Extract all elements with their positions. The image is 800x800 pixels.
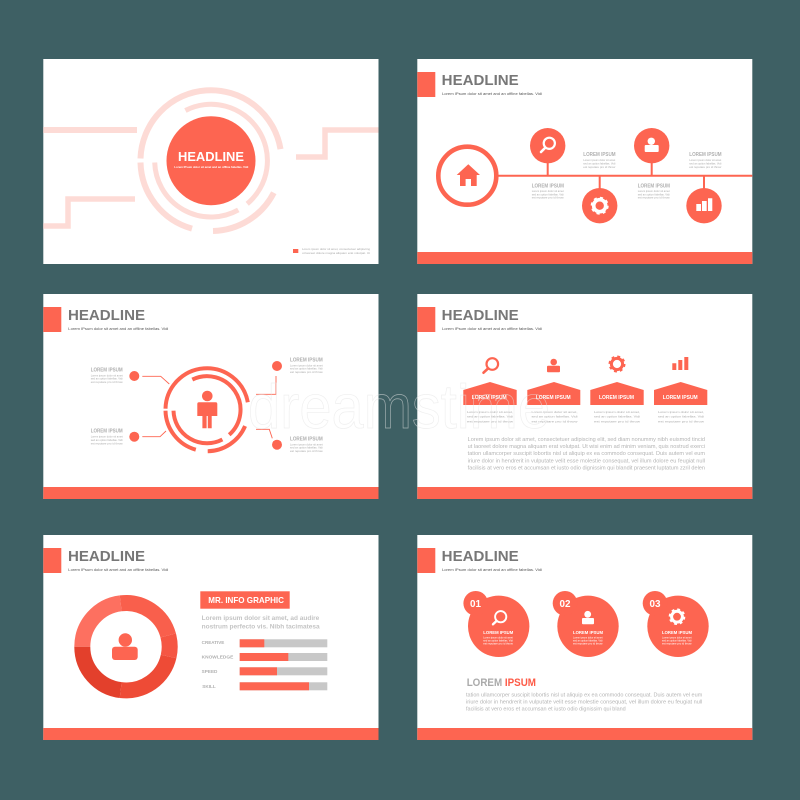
node dots: [129, 361, 282, 450]
step 2 text: sed an option fabellas. Vidi: [532, 415, 578, 419]
label: bottom right: [290, 437, 324, 453]
icon: person: [634, 128, 669, 163]
icon: bars: [686, 188, 722, 223]
skill bar chart: [202, 639, 327, 690]
icon: home: [438, 147, 496, 205]
section heading: LOREM IPSUM: [467, 677, 536, 689]
label: timeline 3: [638, 183, 671, 200]
footer bar: [417, 728, 752, 740]
circle 03: LOREM IPSUM: [662, 630, 692, 635]
circle 01: [463, 591, 529, 657]
circle 02: LOREM IPSUM: [573, 630, 603, 635]
icon: magnifier: [530, 128, 565, 163]
header marker: [43, 548, 61, 573]
label: timeline 4: sed an option fabellas. Vidi: [689, 161, 722, 165]
step 3 tab: LOREM IPSUM: [599, 395, 634, 401]
label: timeline 2: est reputare pro id throw: [583, 165, 616, 169]
footer bar: [43, 728, 379, 740]
subtitle: Lorem IPsum dolor sit amet and an offline fabellas. Vidi: [68, 567, 168, 572]
subtitle: Lorem IPsum dolor sit amet and an offline fabellas. Vidi: [68, 326, 168, 331]
header marker: [417, 72, 435, 97]
label: top right: LOREM IPSUM: [290, 358, 323, 364]
panel: three circles slide: [417, 535, 752, 740]
step 1 text: est reputare pro id throw: [467, 419, 514, 423]
circle 03: 03: [650, 599, 661, 610]
step 4 text: [658, 410, 705, 423]
label: top left: LOREM IPSUM: [91, 368, 123, 374]
label: top right: sed an option fabellas. Vidi: [290, 367, 323, 371]
label: timeline 4: LOREM IPSUM: [689, 152, 722, 158]
icon: gear: [582, 188, 617, 223]
step 2 text: Lorem ipsum dolor sit amet,: [532, 410, 578, 414]
timeline axis with stems: [498, 163, 752, 190]
legend marker: [293, 249, 298, 253]
skill bar chart: CREATIVE: [202, 640, 224, 645]
step 4 text: sed an option fabellas. Vidi: [658, 415, 704, 419]
label: bottom left: LOREM IPSUM: [91, 429, 123, 435]
footer bar: [43, 487, 379, 499]
panel: profile slide: [43, 535, 379, 740]
circle 03: est reputare pro id throw: [662, 641, 692, 645]
label: bottom left: Lorem ipsum dolor sit amet: [91, 435, 123, 439]
step 4 tab: [654, 382, 707, 405]
body paragraph: [468, 437, 705, 471]
circle 01: sed an option fabellas. Vidi: [483, 638, 513, 642]
step 3 text: Lorem ipsum dolor sit amet,: [594, 410, 640, 414]
center circle: [166, 116, 256, 205]
step 1 tab: [463, 382, 517, 405]
label: bottom left: est reputare pro id throw: [91, 441, 124, 445]
name banner: [200, 591, 290, 609]
label: timeline 2: LOREM IPSUM: [583, 152, 616, 158]
section body text: facilisis at vero eros et accumsan et iusto odio dignissim qui bland: [466, 706, 626, 712]
cover subtitle: Lorem IPsum dolor sit amet and an offline fabellas. Vidi: [174, 165, 248, 169]
headline: HEADLINE: [442, 72, 519, 89]
footer bar: [417, 487, 752, 499]
label: bottom left: sed an option fabellas. Vidi: [91, 438, 123, 442]
step 4 text: est reputare pro id throw: [658, 419, 705, 423]
right stepped circuit line: [296, 130, 378, 157]
donut chart: [82, 603, 170, 690]
step 3 text: sed an option fabellas. Vidi: [594, 415, 640, 419]
circle 01: LOREM IPSUM: [483, 630, 514, 635]
connectors: [142, 376, 276, 438]
left stepped circuit line: [43, 199, 135, 226]
icon: bars: [672, 357, 688, 370]
label: timeline 3: LOREM IPSUM: [638, 183, 670, 189]
profile text: [202, 615, 320, 630]
panel: four steps slide: [417, 294, 752, 499]
circle 02: Lorem ipsum dolor sit amet: [573, 635, 603, 639]
concentric ring arcs: [140, 90, 280, 231]
icon: person: [547, 359, 560, 372]
label: timeline 2: [583, 152, 616, 169]
label: top right: est reputare pro id throw: [290, 370, 324, 374]
step 2 text: [532, 410, 579, 423]
step 2 tab: LOREM IPSUM: [536, 395, 571, 401]
label: bottom right: est reputare pro id throw: [290, 449, 324, 453]
label: timeline 1: LOREM IPSUM: [532, 183, 564, 189]
step 3 text: est reputare pro id throw: [594, 419, 641, 423]
subtitle: Lorem IPsum dolor sit amet and an offline fabellas. Vidi: [442, 326, 542, 331]
body paragraph: Lorem ipsum dolor sit amet, consectetuer adipiscing elit, sed diam nonummy nibh euismod tincid: [468, 437, 705, 443]
label: bottom right: sed an option fabellas. Vidi: [290, 446, 323, 450]
body paragraph: ut laoreet dolore magna aliquam erat volutpat. Ut wisi enim ad minim veniam, quis nostrud exerci: [468, 444, 705, 450]
headline: HEADLINE: [68, 307, 145, 324]
circle 02: est reputare pro id throw: [573, 641, 603, 645]
circle 03: [643, 591, 709, 657]
circle 02: 02: [560, 599, 571, 610]
circle 03: Lorem ipsum dolor sit amet: [662, 635, 692, 639]
label: bottom right: LOREM IPSUM: [290, 437, 323, 443]
header marker: [417, 307, 435, 332]
step 4 tab: LOREM IPSUM: [663, 395, 698, 401]
label: top left: Lorem ipsum dolor sit amet: [91, 374, 123, 378]
legend text: Lorem ipsum dolor sit amet, consectetuer adipiscing: [302, 247, 370, 251]
skill bar chart: SPEED: [202, 669, 218, 674]
headline: HEADLINE: [68, 548, 145, 565]
left circuit line top: [43, 127, 137, 133]
label: top right: [290, 358, 324, 374]
label: timeline 1: Lorem ipsum dolor sit amet: [532, 189, 564, 193]
cover headline: HEADLINE: [178, 149, 244, 164]
label: timeline 1: sed an option fabellas. Vidi: [532, 192, 564, 196]
ring diagram: [166, 368, 248, 451]
body paragraph: facilisis at vero eros et accumsan et iusto odio dignissim qui blandit praesent luptatum zzril delen: [468, 465, 705, 471]
label: top left: [91, 368, 124, 384]
label: timeline 4: Lorem ipsum dolor sit amet: [689, 158, 721, 162]
profile text: Lorem ipsum dolor sit amet, ad audire: [202, 615, 320, 622]
skill bar chart: KNOWLEDGE: [202, 655, 233, 660]
name banner: MR. INFO GRAPHIC: [208, 595, 284, 605]
legend text: [302, 247, 370, 255]
step 4 text: Lorem ipsum dolor sit amet,: [658, 410, 704, 414]
label: bottom right: Lorem ipsum dolor sit amet: [290, 443, 323, 447]
body paragraph: tation ullamcorper suscipit lobortis nisl ut aliquip ex ea commodo consequat. Duis autem vel eum: [468, 451, 705, 457]
label: top left: est reputare pro id throw: [91, 380, 124, 384]
label: top right: Lorem ipsum dolor sit amet: [290, 364, 323, 368]
label: timeline 3: sed an option fabellas. Vidi: [638, 192, 670, 196]
header marker: [43, 307, 61, 332]
circle 01: 01: [470, 599, 481, 610]
section body text: tation ullamcorper suscipit lobortis nisl ut aliquip ex ea commodo consequat. Duis autem vel eum: [466, 692, 703, 698]
label: timeline 1: [532, 183, 565, 200]
circle 03: sed an option fabellas. Vidi: [662, 638, 692, 642]
panel: cover slide: [43, 59, 379, 264]
icon: standing person: [197, 391, 217, 428]
circle 01: est reputare pro id throw: [483, 641, 514, 645]
subtitle: Lorem IPsum dolor sit amet and an offline fabellas. Vidi: [442, 567, 542, 572]
step 1 text: sed an option fabellas. Vidi: [467, 415, 513, 419]
headline: HEADLINE: [442, 307, 519, 324]
label: timeline 3: est reputare pro id throw: [638, 196, 671, 200]
step 1 tab: LOREM IPSUM: [472, 395, 507, 401]
icon: person: [112, 633, 138, 660]
body paragraph: iriure dolor in hendrerit in vulputate velit esse molestie consequat, vel illum dolore eu feugiat null: [468, 458, 705, 464]
label: top left: sed an option fabellas. Vidi: [91, 377, 123, 381]
step 2 text: est reputare pro id throw: [532, 419, 579, 423]
step 2 tab: [527, 382, 580, 405]
legend text: ut laoreet dolore magna aliquam erat volutpat. Ut: [302, 251, 370, 255]
label: timeline 2: Lorem ipsum dolor sit amet: [583, 158, 615, 162]
step 1 text: [467, 410, 514, 423]
circle 02: [553, 591, 619, 657]
circle 01: Lorem ipsum dolor sit amet: [483, 635, 513, 639]
subtitle: Lorem IPsum dolor sit amet and an offline fabellas. Vidi: [442, 91, 542, 96]
label: timeline 2: sed an option fabellas. Vidi: [583, 161, 616, 165]
section body text: [466, 692, 703, 712]
section body text: iriure dolor in hendrerit in vulputate velit esse molestie consequat, vel illum dolore eu feugiat null: [466, 699, 702, 705]
label: timeline 3: Lorem ipsum dolor sit amet: [638, 189, 670, 193]
header marker: [417, 548, 435, 573]
footer bar: [417, 252, 752, 264]
icon: magnifier: [484, 358, 498, 373]
profile text: nostrum perfecto vis. Nibh tacimatesa: [202, 623, 320, 630]
step 3 text: [594, 410, 641, 423]
label: timeline 1: est reputare pro id throw: [532, 196, 565, 200]
label: timeline 4: [689, 152, 722, 169]
circle 02: sed an option fabellas. Vidi: [573, 638, 603, 642]
label: bottom left: [91, 429, 124, 445]
skill bar chart: SKILL: [202, 684, 216, 689]
step 3 tab: [590, 382, 644, 405]
step 1 text: Lorem ipsum dolor sit amet,: [467, 410, 513, 414]
panel: person diagram slide: [43, 294, 379, 499]
headline: HEADLINE: [442, 548, 519, 565]
label: timeline 4: est reputare pro id throw: [689, 165, 722, 169]
watermark: dreamstime: [248, 373, 550, 442]
icon: gear: [609, 356, 625, 372]
panel: timeline slide: [417, 59, 752, 264]
